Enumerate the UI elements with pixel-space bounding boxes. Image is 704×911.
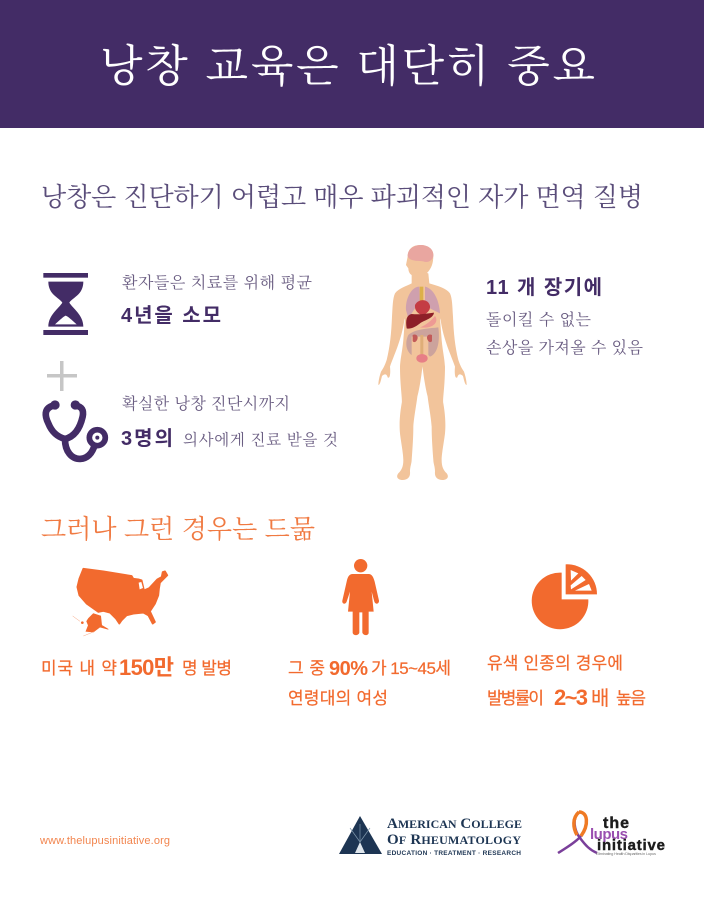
stat: women: [288, 658, 451, 708]
stat: organs: [486, 276, 644, 357]
vessel: [420, 335, 423, 354]
stat: prevalence: 배: [591, 687, 609, 710]
intestine: [406, 327, 439, 357]
stat: US patients: 150만: [119, 655, 174, 680]
icon: US map: [73, 569, 167, 636]
body silhouette: [378, 245, 467, 480]
stat: three doctors: [121, 394, 338, 450]
icon: hourglass: [43, 273, 88, 335]
stat: prevalence: 유색 인종의 경우에: [487, 654, 623, 673]
logo: the lupus initiative: Eliminating Health Disparities in Lupus: [596, 851, 656, 856]
website link: www.thelupusinitiative.org: [39, 835, 170, 847]
lungs: [406, 287, 440, 318]
icon: plus: [47, 361, 77, 391]
stat: three doctors: 의사에게 진료 받을 것: [183, 430, 338, 449]
stat: prevalence: 2~3: [554, 685, 588, 710]
logo: the lupus initiative: lupus: [590, 826, 628, 843]
stat: treatment years: 환자들은 치료를 위해 평균: [122, 273, 313, 292]
stat: prevalence: 발병률이: [487, 689, 544, 708]
stat: prevalence: [487, 654, 646, 710]
stomach: [420, 316, 436, 328]
stat: women: 가 15~45세: [371, 659, 451, 678]
bladder: [416, 354, 428, 363]
logo: American College of Rheumatology: OF RHEUMATOLOGY: [387, 832, 521, 848]
section heading: 그러나 그런 경우는 드묾: [41, 514, 315, 544]
stat: prevalence: 높음: [616, 689, 646, 708]
logo name: AMERICAN COLLEGE: [387, 816, 522, 832]
stat: women: 연령대의 여성: [288, 689, 388, 708]
icon: woman: [342, 559, 379, 635]
heart: [415, 300, 430, 315]
liver: [406, 313, 434, 329]
stat: US patients: 명 발병: [182, 659, 232, 678]
stat: US patients: 미국 내 약: [41, 659, 117, 678]
icon: stethoscope: [46, 400, 105, 459]
stat: organs: 돌이킬 수 없는: [486, 310, 592, 329]
stat: organs: 손상을 가져올 수 있음: [486, 338, 644, 357]
header banner: [0, 0, 704, 128]
stat: organs: 11 개 장기에: [486, 276, 602, 299]
stat: three doctors: 확실한 낭창 진단시까지: [122, 394, 290, 413]
windpipe: [420, 287, 423, 302]
logo: American College of Rheumatology: [339, 816, 522, 857]
subtitle: 낭창은 진단하기 어렵고 매우 파괴적인 자가 면역 질병: [41, 182, 643, 212]
icon: pie chart: [532, 564, 597, 629]
illustration: human body with organs: [378, 245, 467, 480]
stat: US patients: [41, 655, 232, 680]
logo wordmark: the: [603, 815, 629, 832]
logo: American College of Rheumatology: EDUCATION · TREATMENT · RESEARCH: [387, 850, 521, 857]
stat: treatment years: 4년을 소모: [121, 304, 221, 327]
stat: three doctors: 3명의: [121, 427, 173, 450]
logo: the lupus initiative: initiative: [597, 837, 665, 854]
logo: the lupus initiative: [558, 812, 665, 856]
triangle emblem: [339, 816, 382, 854]
stat: treatment years: [121, 273, 313, 327]
stat: women: 90%: [329, 658, 368, 680]
stat: women: 그 중: [288, 659, 325, 678]
kidneys: [413, 334, 432, 342]
ribbon: [558, 812, 597, 853]
title: 낭창 교육은 대단히 중요: [100, 42, 595, 91]
brain: [408, 245, 433, 262]
